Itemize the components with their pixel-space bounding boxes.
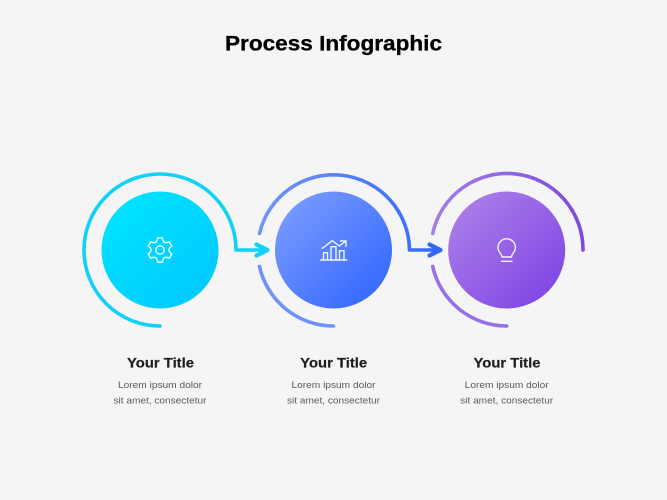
icon: bar chart	[321, 241, 347, 260]
circle 2	[275, 192, 392, 308]
step 1 group	[84, 174, 268, 406]
step 2 description: Lorem ipsum dolor	[292, 380, 376, 391]
step 3 title: Your Title	[474, 354, 541, 370]
ring and arrow 1	[84, 174, 268, 326]
circle 3	[448, 192, 565, 308]
icon: gear	[147, 238, 173, 262]
icon: light bulb	[498, 239, 515, 261]
step 3 description: Lorem ipsum dolor	[465, 380, 549, 391]
step 3 group	[433, 173, 583, 406]
step 2 title: Your Title	[300, 354, 367, 370]
step 1 title: Your Title	[127, 354, 194, 370]
step 1 description: sit amet, consectetur	[114, 395, 206, 406]
ring and arrow 2	[260, 175, 440, 326]
circle 1	[102, 192, 218, 308]
title: Process Infographic	[225, 32, 442, 56]
ring 3	[433, 173, 583, 326]
step 3 description: sit amet, consectetur	[460, 395, 553, 406]
step 1 description: Lorem ipsum dolor	[118, 380, 202, 391]
step 2 description: sit amet, consectetur	[287, 395, 380, 406]
step 2 group	[260, 175, 440, 406]
